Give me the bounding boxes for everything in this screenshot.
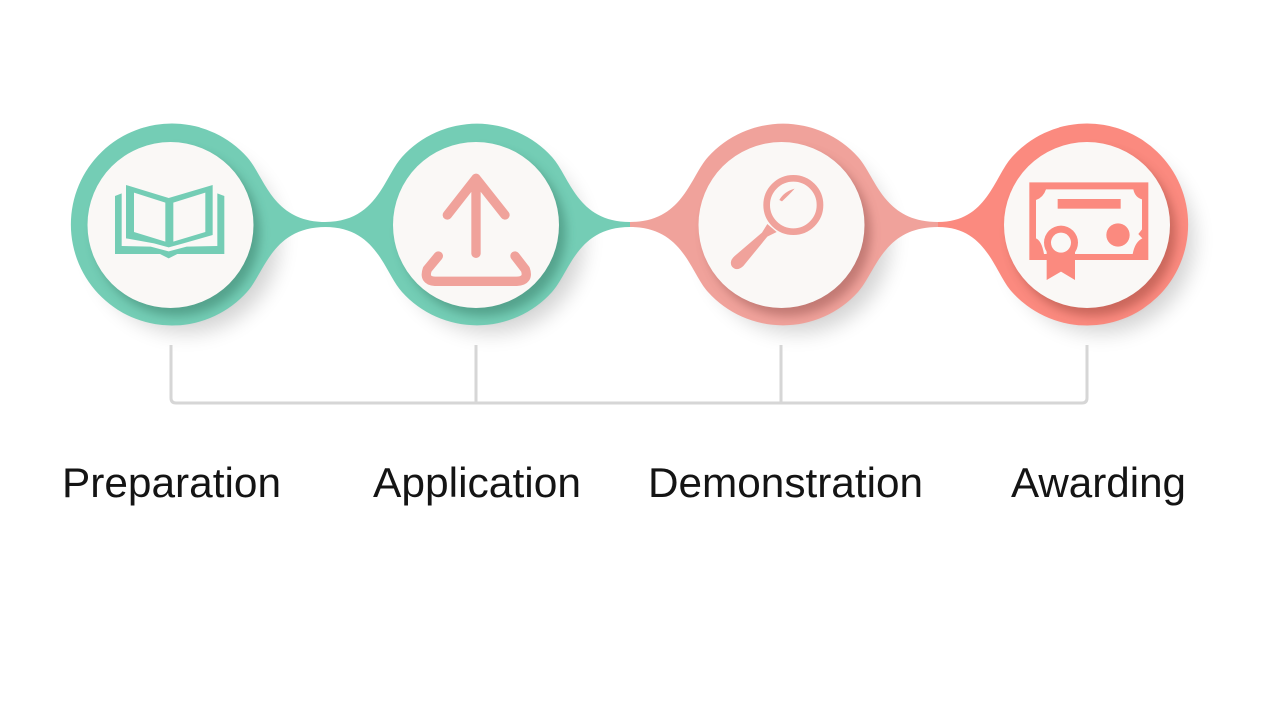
step 2 node: Application [325, 124, 630, 325]
soft drop shadows under rings [93, 147, 1194, 333]
bracket connecting steps to labels [171, 345, 1087, 403]
step 1 node: Preparation [71, 123, 326, 326]
step 4 node: Awarding [938, 123, 1188, 326]
label: Preparation: Preparation [62, 459, 281, 506]
icon: upload arrow [426, 178, 526, 281]
icon: open book [115, 185, 224, 258]
step 3 node: Demonstration [630, 124, 938, 325]
icon: magnifying glass [731, 178, 820, 269]
icon: certificate with ribbon [1029, 182, 1148, 280]
label: Application: Application [373, 459, 581, 506]
label: Awarding: Awarding [1011, 459, 1186, 506]
label: Demonstration: Demonstration [648, 459, 923, 506]
